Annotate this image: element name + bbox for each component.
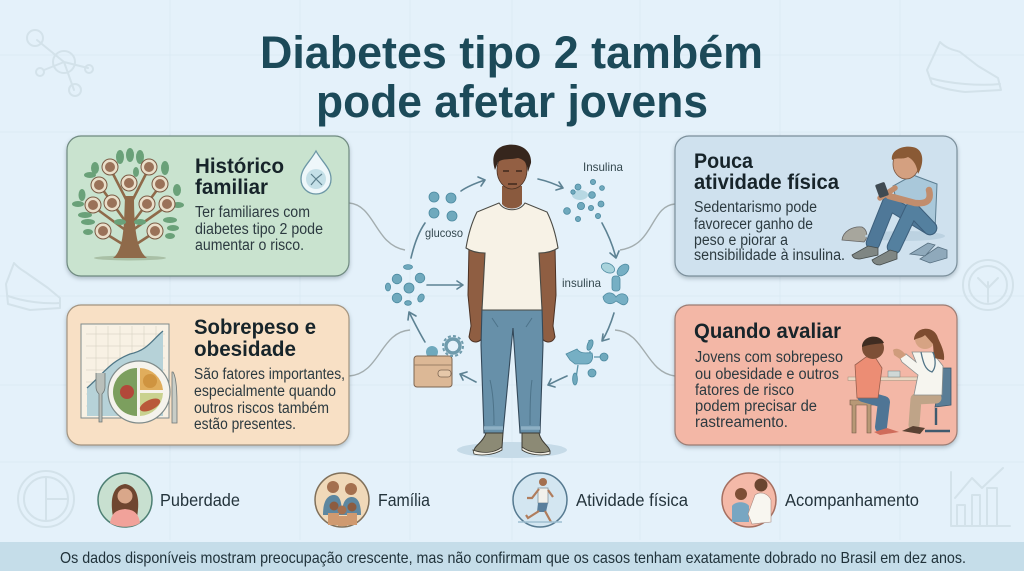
molecule shape — [566, 339, 608, 385]
body text: rastreamento. — [695, 414, 788, 431]
central figure: young person — [457, 145, 567, 458]
connector: overweight to cycle — [349, 330, 410, 376]
body text — [194, 366, 345, 433]
face — [503, 171, 522, 184]
body text: aumentar o risco. — [195, 237, 304, 254]
body text: Jovens com sobrepeso — [695, 349, 843, 366]
icon: plate with food — [108, 361, 170, 423]
heading: familiar — [195, 175, 269, 199]
heading: Pouca — [694, 149, 754, 173]
head — [497, 151, 527, 189]
illustration: child with doctor — [848, 329, 951, 435]
label: glucose: glucoso — [425, 226, 463, 240]
decorative icon: tree circle — [963, 260, 1013, 310]
jeans — [481, 307, 543, 433]
title: pode afetar jovens — [316, 76, 708, 127]
legend: family: Família — [378, 490, 430, 510]
t-shirt — [466, 203, 558, 310]
body text: diabetes tipo 2 pode — [195, 221, 323, 238]
chart: rising curve — [81, 324, 169, 418]
icon: wallet and gear — [414, 336, 463, 387]
footer band — [0, 542, 1024, 571]
legend: puberty — [98, 473, 240, 527]
body text: favorecer ganho de — [694, 216, 813, 233]
icon: water drop with molecule — [301, 151, 331, 194]
arms — [468, 246, 489, 342]
heading — [195, 154, 284, 199]
heading: Histórico — [195, 154, 284, 178]
illustration: family tree — [72, 148, 184, 260]
body text: outros riscos também — [194, 400, 329, 417]
heading — [694, 149, 840, 194]
body text: especialmente quando — [194, 383, 336, 400]
heading: obesidade — [194, 337, 296, 361]
legend: family — [315, 473, 430, 527]
cycle diagram — [385, 160, 631, 387]
body text: sensibilidade à insulina. — [694, 247, 845, 264]
icon: knife — [172, 372, 177, 423]
body text: ou obesidade e outros — [695, 366, 839, 383]
shoes — [474, 433, 503, 453]
decorative icon: sneaker left — [6, 263, 60, 310]
panel: when to evaluate — [675, 305, 957, 445]
decorative icon: plate circle — [18, 471, 74, 527]
icon: fork — [96, 373, 105, 422]
body text: peso e piorar a — [694, 232, 788, 249]
legend: puberty: Puberdade — [160, 490, 240, 510]
label: insulin receptor: insulina — [562, 276, 601, 290]
heading: atividade física — [694, 170, 840, 194]
legend: physical activity: Atividade física — [576, 490, 688, 510]
panel: overweight and obesity — [67, 305, 349, 445]
decorative icon: bar chart — [951, 468, 1010, 526]
glucose cluster left — [385, 265, 425, 305]
heading — [194, 315, 316, 361]
panel: low physical activity — [675, 136, 957, 276]
title — [260, 27, 763, 127]
body text — [694, 199, 845, 264]
body text — [195, 204, 323, 254]
neck — [502, 186, 522, 208]
body text: São fatores importantes, — [194, 366, 345, 383]
body text: podem precisar de — [695, 398, 817, 415]
connector: evaluation to cycle — [615, 330, 675, 376]
decorative icon: sneaker top right — [927, 42, 1001, 92]
body text: estão presentes. — [194, 416, 296, 433]
arrows — [408, 177, 619, 387]
label: insulin top: Insulina — [583, 160, 623, 174]
legend: physical activity — [513, 473, 688, 527]
legend: follow-up — [722, 473, 919, 527]
illustration: seated teen with phone — [842, 147, 947, 265]
glucose dots — [429, 192, 457, 221]
body text — [695, 349, 843, 431]
heading: Quando avaliar — [694, 319, 842, 343]
panel: family history — [67, 136, 349, 276]
body text: Ter familiares com — [195, 204, 310, 221]
body text: fatores de risco — [695, 382, 794, 399]
decorative icon: molecule — [27, 30, 93, 96]
body text: Sedentarismo pode — [694, 199, 817, 216]
connector: family history to cycle — [349, 203, 405, 250]
connector: low activity to cycle — [620, 204, 675, 250]
insulin particle cluster — [564, 179, 604, 222]
insulin receptor shape — [600, 261, 631, 305]
heading: Sobrepeso e — [194, 315, 316, 339]
title: Diabetes tipo 2 também — [260, 27, 763, 78]
hair — [493, 145, 531, 172]
legend: follow-up: Acompanhamento — [785, 490, 919, 510]
